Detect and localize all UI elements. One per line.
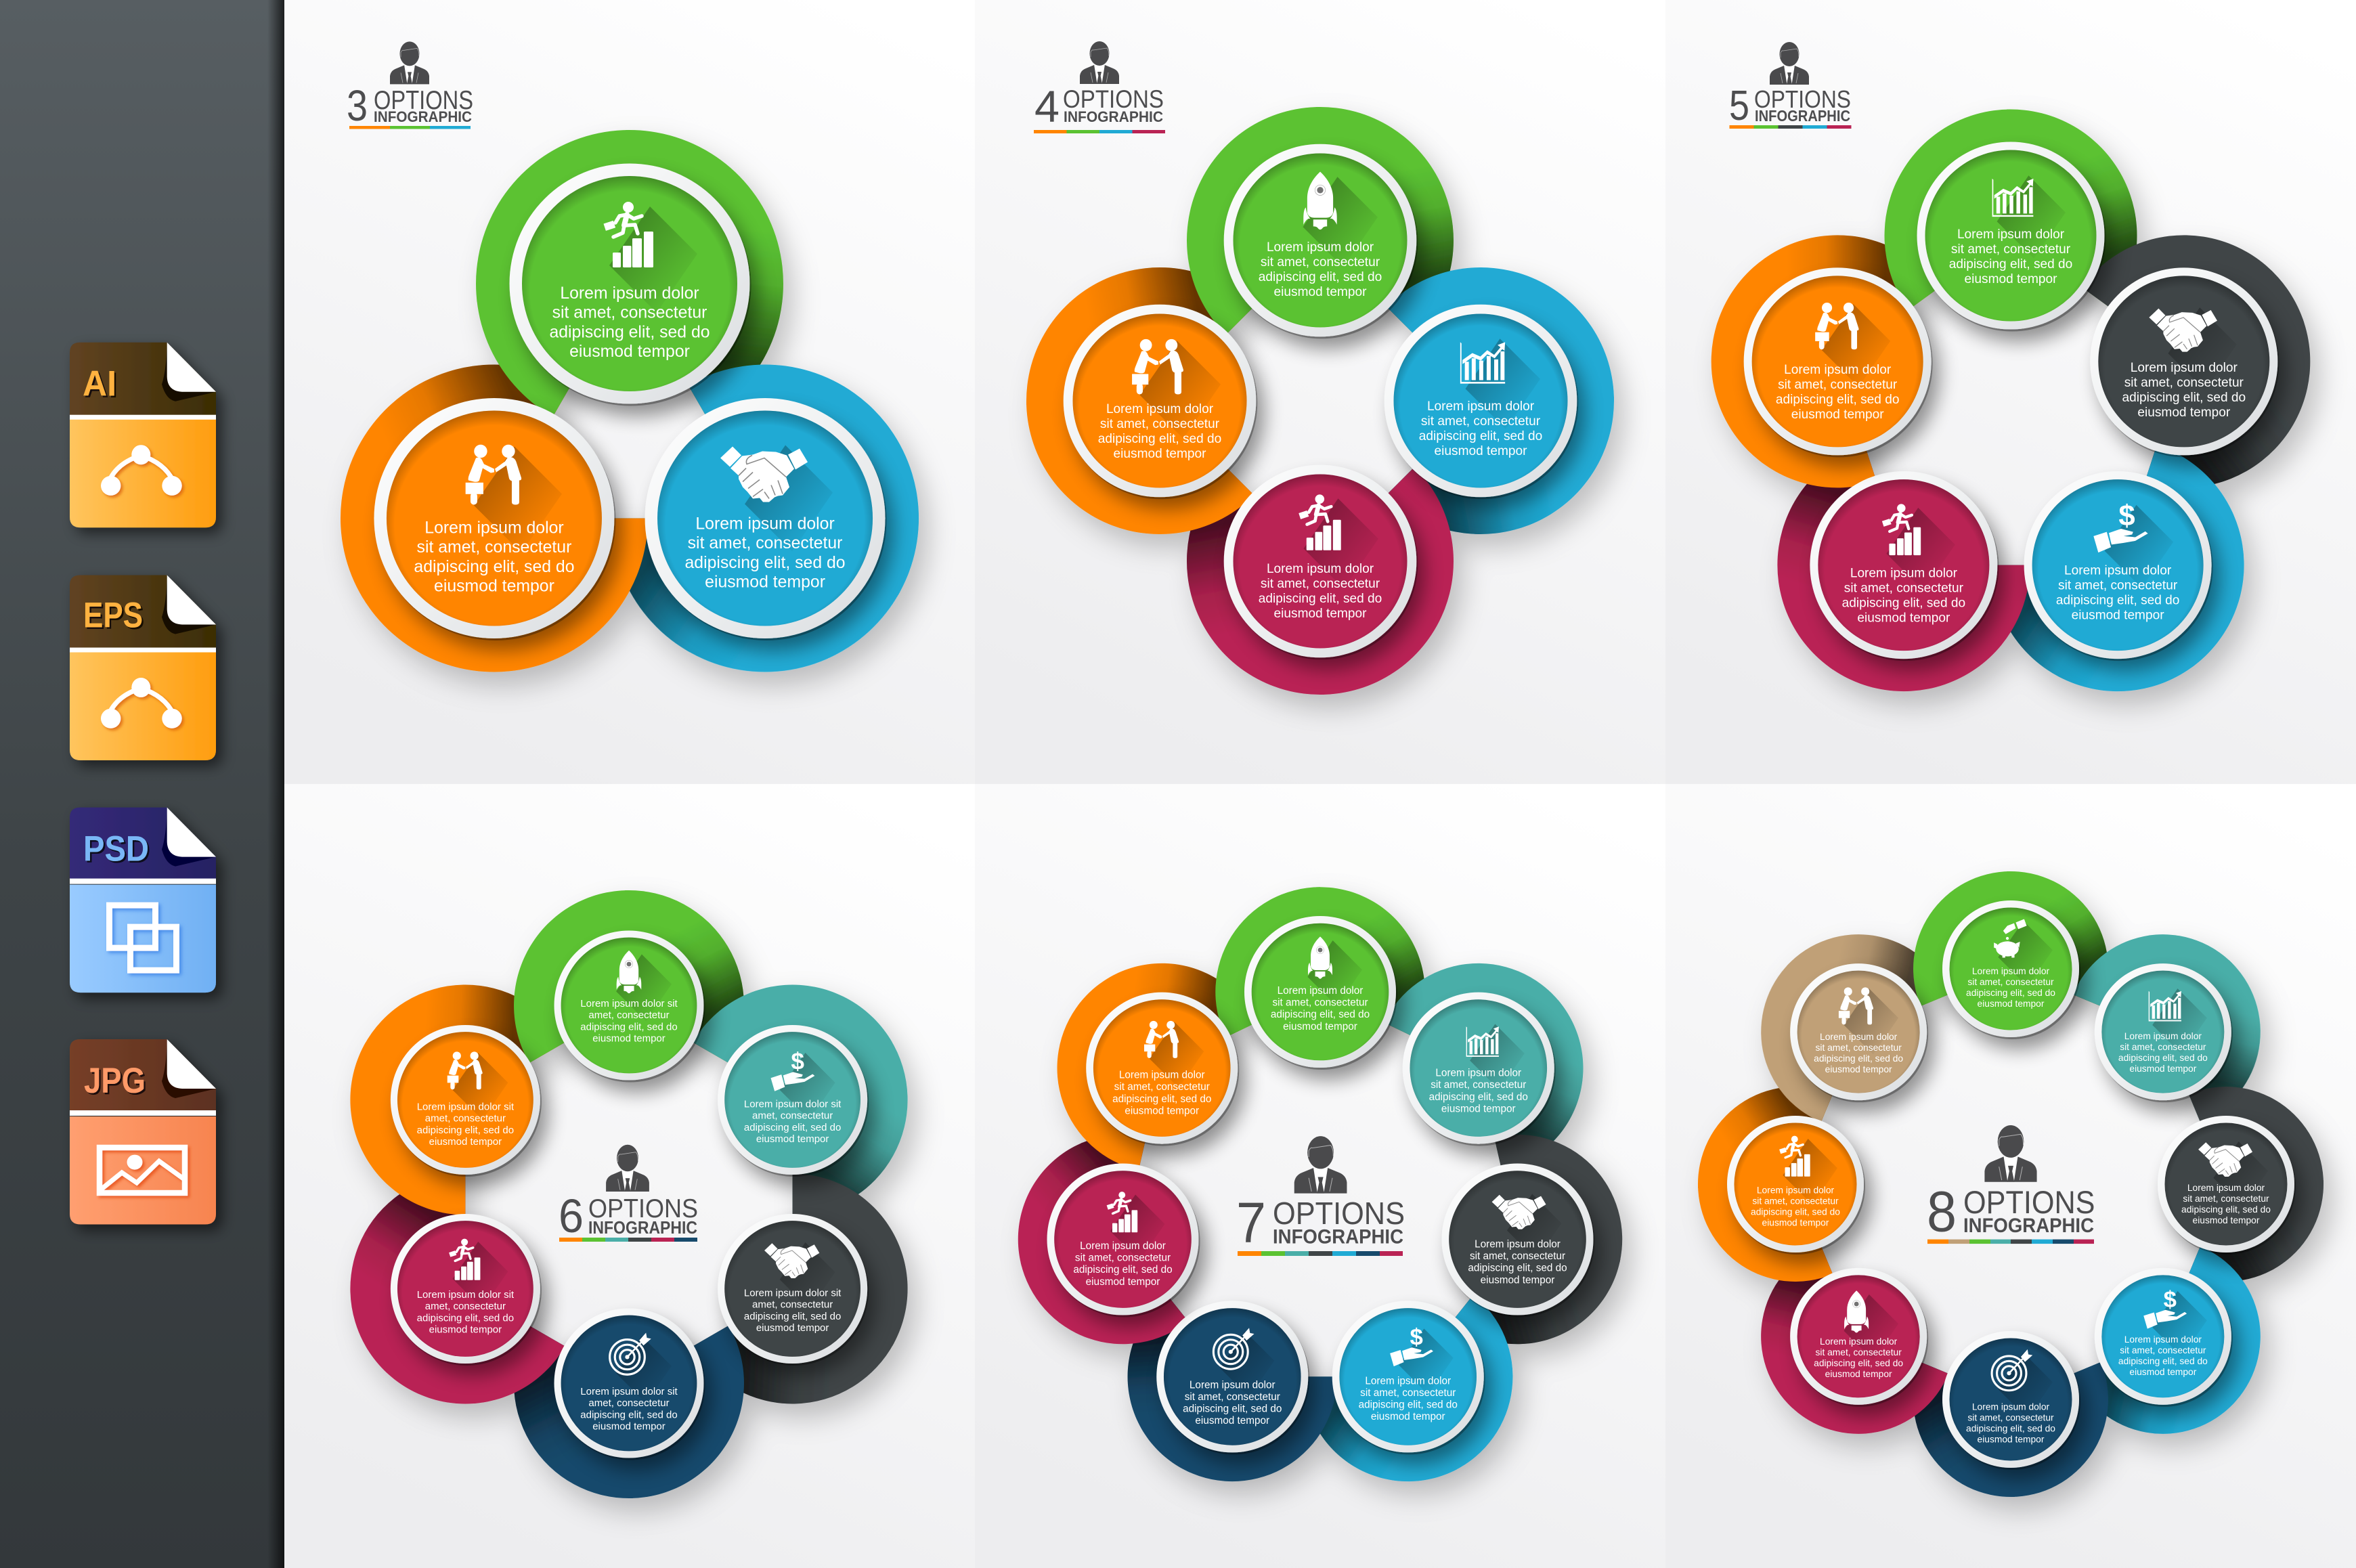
title: 3 options [347, 41, 473, 130]
node: green: adipiscing elit, sed do [580, 1021, 678, 1032]
node: navy: eiusmod tempor [1195, 1415, 1269, 1427]
segment bands [1698, 871, 2324, 1497]
node: teal: Lorem ipsum dolor [2124, 1031, 2202, 1041]
node: navy: adipiscing elit, sed do [1183, 1403, 1282, 1415]
sidebar [0, 0, 284, 1568]
node: orange: Lorem ipsum dolor [1119, 1070, 1205, 1081]
node: dark: eiusmod tempor [2193, 1215, 2260, 1225]
node: green: adipiscing elit, sed do [1271, 1009, 1370, 1020]
node: teal: eiusmod tempor [756, 1133, 829, 1145]
node: green: adipiscing elit, sed do [1966, 988, 2055, 998]
title: 5 options: OPTIONS [1754, 85, 1851, 113]
node: dark: Lorem ipsum dolor [2131, 361, 2238, 375]
node: dark: Lorem ipsum dolor sit [744, 1288, 842, 1299]
node: blue [2024, 471, 2212, 659]
node: green: eiusmod tempor [1283, 1021, 1357, 1032]
panel: 4 options [975, 0, 1665, 784]
title: 3 options: 3 [347, 81, 368, 130]
node: teal [718, 1025, 867, 1175]
node: crimson [1790, 1268, 1927, 1405]
title: 7 options: INFOGRAPHIC [1273, 1225, 1403, 1248]
node: dark: eiusmod tempor [756, 1322, 829, 1334]
node: orange [374, 398, 614, 638]
node: orange: Lorem ipsum dolor sit [417, 1101, 515, 1113]
node: green: amet, consectetur [588, 1009, 670, 1021]
node: green [509, 164, 750, 404]
file icon: AI: AI [83, 364, 116, 404]
node: orange: adipiscing elit, sed do [1098, 432, 1221, 446]
node: teal [1403, 993, 1554, 1144]
node: blue: sit amet, consectetur [2058, 579, 2178, 593]
segment bands [1026, 107, 1614, 695]
node: blue: sit amet, consectetur [688, 534, 842, 552]
node: blue [2095, 1268, 2231, 1405]
node: green: eiusmod tempor [1274, 285, 1367, 299]
node: dark: eiusmod tempor [1481, 1274, 1554, 1286]
node: crimson [391, 1214, 540, 1364]
node: navy: eiusmod tempor [1978, 1435, 2045, 1445]
panel: 7 options [975, 784, 1665, 1568]
node: orange [1744, 267, 1932, 455]
node: orange: eiusmod tempor [434, 578, 554, 596]
node: teal: Lorem ipsum dolor sit [744, 1098, 842, 1110]
title: 8 options: 8 [1927, 1179, 1957, 1243]
node: teal: sit amet, consectetur [2120, 1042, 2206, 1052]
segment bands [1678, 110, 2343, 741]
segment bands [997, 887, 1643, 1517]
node: orange: eiusmod tempor [1762, 1218, 1829, 1228]
node: teal: adipiscing elit, sed do [744, 1122, 841, 1133]
node: blue: Lorem ipsum dolor [2064, 564, 2172, 578]
node: dark: adipiscing elit, sed do [2122, 391, 2246, 405]
node: navy [1156, 1301, 1308, 1452]
title: 4 options: 4 [1034, 81, 1060, 131]
title: 8 options: OPTIONS [1963, 1184, 2095, 1220]
node: blue: Lorem ipsum dolor [1365, 1375, 1451, 1387]
node: dark: amet, consectetur [752, 1299, 833, 1311]
node: crimson: sit amet, consectetur [1815, 1347, 1902, 1357]
file icon: JPG [70, 1039, 216, 1224]
node: green: sit amet, consectetur [1967, 977, 2054, 987]
node: dark: adipiscing elit, sed do [744, 1311, 841, 1322]
node: dark: sit amet, consectetur [2124, 376, 2244, 390]
title: 3 options: OPTIONS [374, 86, 473, 115]
node: crimson: eiusmod tempor [1857, 611, 1950, 626]
node: crimson: Lorem ipsum dolor [1850, 567, 1958, 581]
node: orange: Lorem ipsum dolor [1106, 402, 1214, 416]
node: dark [2090, 267, 2277, 455]
node: blue: eiusmod tempor [2129, 1367, 2197, 1377]
node: dark: adipiscing elit, sed do [1468, 1263, 1567, 1274]
node: green [1942, 900, 2079, 1037]
node: navy: amet, consectetur [588, 1397, 670, 1409]
node: crimson [1224, 465, 1416, 657]
node: orange: adipiscing elit, sed do [1751, 1207, 1840, 1217]
node: blue: Lorem ipsum dolor [695, 515, 835, 533]
node: blue: adipiscing elit, sed do [2056, 594, 2179, 608]
node: tan [1790, 963, 1927, 1100]
node: orange: eiusmod tempor [1125, 1105, 1199, 1116]
node: blue: eiusmod tempor [1371, 1411, 1445, 1422]
title: 7 options: OPTIONS [1273, 1196, 1405, 1231]
title: 4 options [1034, 41, 1165, 133]
node: blue: eiusmod tempor [705, 573, 825, 592]
node: blue: Lorem ipsum dolor [1427, 399, 1535, 414]
node: orange: adipiscing elit, sed do [1112, 1093, 1211, 1105]
node: blue [645, 398, 886, 638]
node: green: sit amet, consectetur [552, 304, 707, 322]
node: orange: sit amet, consectetur [1100, 417, 1220, 431]
node: navy: Lorem ipsum dolor [1972, 1401, 2050, 1412]
node: orange: eiusmod tempor [429, 1136, 502, 1148]
node: green: adipiscing elit, sed do [1949, 257, 2072, 271]
node: blue: adipiscing elit, sed do [1359, 1399, 1458, 1411]
node: green [1224, 144, 1416, 336]
node: orange: adipiscing elit, sed do [417, 1125, 514, 1136]
node: crimson: Lorem ipsum dolor sit [417, 1289, 515, 1301]
node: orange: sit amet, consectetur [417, 538, 571, 557]
title: 6 options: OPTIONS [588, 1194, 698, 1223]
node: dark: sit amet, consectetur [1470, 1250, 1565, 1262]
node: blue: eiusmod tempor [1435, 444, 1527, 458]
node: teal: eiusmod tempor [2129, 1064, 2197, 1074]
node: blue: sit amet, consectetur [1360, 1387, 1456, 1399]
node: blue: sit amet, consectetur [1421, 414, 1541, 429]
node: orange [1064, 305, 1256, 497]
node: green [554, 930, 704, 1081]
node: green: Lorem ipsum dolor [1278, 985, 1363, 997]
node: crimson: adipiscing elit, sed do [1073, 1264, 1173, 1276]
panel: 3 options [284, 0, 975, 784]
node: teal: Lorem ipsum dolor [1435, 1068, 1521, 1079]
node: teal: sit amet, consectetur [1431, 1079, 1526, 1091]
node: orange: eiusmod tempor [1791, 408, 1884, 422]
node: blue: sit amet, consectetur [2120, 1345, 2206, 1355]
node: crimson [1810, 471, 1997, 659]
node: crimson: adipiscing elit, sed do [417, 1312, 514, 1324]
node: crimson: Lorem ipsum dolor [1820, 1336, 1898, 1347]
segment bands [284, 130, 975, 728]
node: green [1244, 916, 1396, 1068]
node: orange: Lorem ipsum dolor [1784, 363, 1892, 377]
node: navy: eiusmod tempor [592, 1421, 666, 1433]
node: navy [554, 1308, 704, 1458]
node: crimson: Lorem ipsum dolor [1267, 562, 1374, 576]
node: blue: Lorem ipsum dolor [2124, 1334, 2202, 1345]
title: 7 options [1236, 1136, 1405, 1256]
node: navy: sit amet, consectetur [1967, 1413, 2054, 1423]
node: green: Lorem ipsum dolor [560, 284, 699, 303]
node: navy: adipiscing elit, sed do [1966, 1424, 2055, 1434]
file icon: JPG: JPG [84, 1061, 146, 1101]
node: navy [1942, 1331, 2079, 1468]
node: crimson: amet, consectetur [425, 1301, 506, 1312]
node: dark: adipiscing elit, sed do [2181, 1204, 2271, 1215]
node: crimson: eiusmod tempor [429, 1324, 502, 1336]
node: orange [391, 1025, 540, 1175]
node: green: Lorem ipsum dolor sit [580, 998, 678, 1009]
node: green: Lorem ipsum dolor [1267, 240, 1374, 255]
node: crimson: eiusmod tempor [1825, 1369, 1892, 1379]
node: orange: amet, consectetur [425, 1113, 506, 1125]
title: 6 options: INFOGRAPHIC [588, 1217, 697, 1238]
node: orange: sit amet, consectetur [1778, 378, 1898, 392]
title: 5 options: 5 [1729, 83, 1749, 129]
file icon: EPS [70, 575, 216, 760]
node: crimson: sit amet, consectetur [1844, 582, 1964, 596]
node: blue: adipiscing elit, sed do [1419, 429, 1542, 443]
node: dark: eiusmod tempor [2137, 406, 2231, 420]
segment bands [308, 890, 950, 1498]
node: crimson: adipiscing elit, sed do [1842, 596, 1965, 611]
file icon: PSD [70, 808, 216, 993]
node: teal: eiusmod tempor [1441, 1103, 1516, 1114]
node: green: eiusmod tempor [569, 343, 690, 361]
node: tan: sit amet, consectetur [1815, 1043, 1902, 1053]
node: dark [2158, 1116, 2294, 1253]
node: green: eiusmod tempor [1965, 272, 2057, 286]
node: tan: Lorem ipsum dolor [1820, 1032, 1898, 1042]
node: orange: sit amet, consectetur [1114, 1081, 1210, 1093]
node: blue: adipiscing elit, sed do [684, 554, 846, 572]
node: crimson: Lorem ipsum dolor [1080, 1240, 1166, 1252]
node: orange: adipiscing elit, sed do [1776, 393, 1899, 407]
panel: 6 options [284, 784, 975, 1568]
file icon: PSD: PSD [83, 829, 149, 869]
panel: 8 options [1665, 784, 2356, 1568]
node: navy: Lorem ipsum dolor sit [580, 1386, 678, 1397]
node: blue [1332, 1301, 1484, 1452]
node: teal: amet, consectetur [752, 1110, 833, 1122]
node: green: eiusmod tempor [592, 1033, 666, 1045]
node: dark: Lorem ipsum dolor [2187, 1183, 2265, 1193]
node: dark: sit amet, consectetur [2183, 1194, 2269, 1204]
node: navy: sit amet, consectetur [1185, 1391, 1280, 1403]
node: navy: Lorem ipsum dolor [1190, 1379, 1275, 1391]
node: tan: eiusmod tempor [1825, 1064, 1892, 1074]
node: green: sit amet, consectetur [1951, 242, 2071, 257]
node: dark: Lorem ipsum dolor [1475, 1239, 1561, 1250]
node: green: adipiscing elit, sed do [1259, 270, 1382, 284]
node: orange [1727, 1116, 1864, 1253]
file icon: AI [70, 343, 216, 527]
title: 7 options: 7 [1236, 1191, 1266, 1255]
node: crimson: sit amet, consectetur [1075, 1253, 1171, 1264]
node: blue: eiusmod tempor [2072, 609, 2164, 623]
node: crimson [1047, 1164, 1198, 1315]
node: green [1917, 142, 2104, 329]
node: navy: adipiscing elit, sed do [580, 1409, 678, 1420]
file icon: EPS: EPS [83, 596, 143, 635]
node: crimson: sit amet, consectetur [1261, 577, 1380, 591]
node: orange: Lorem ipsum dolor [1757, 1185, 1835, 1196]
node: blue [1384, 305, 1577, 497]
node: green: Lorem ipsum dolor [1957, 227, 2065, 242]
node: green: sit amet, consectetur [1261, 255, 1380, 269]
node: teal [2095, 963, 2231, 1100]
node: crimson: eiusmod tempor [1086, 1276, 1160, 1288]
title: 5 options: INFOGRAPHIC [1755, 107, 1850, 125]
title: 3 options: INFOGRAPHIC [374, 108, 472, 125]
node: orange: eiusmod tempor [1114, 447, 1206, 461]
title: 4 options: INFOGRAPHIC [1064, 108, 1163, 125]
node: orange: adipiscing elit, sed do [414, 558, 575, 576]
title: 8 options [1927, 1125, 2095, 1244]
node: orange [1086, 993, 1238, 1144]
title: 6 options [559, 1145, 698, 1242]
title: 8 options: INFOGRAPHIC [1963, 1215, 2094, 1237]
node: green: eiusmod tempor [1978, 999, 2045, 1009]
node: dark [718, 1214, 867, 1364]
node: crimson: eiusmod tempor [1274, 607, 1367, 621]
node: tan: adipiscing elit, sed do [1814, 1053, 1903, 1064]
node: green: Lorem ipsum dolor [1972, 966, 2050, 976]
node: green: adipiscing elit, sed do [549, 323, 710, 341]
node: teal: adipiscing elit, sed do [2118, 1053, 2208, 1063]
node: teal: adipiscing elit, sed do [1429, 1091, 1528, 1103]
node: orange: sit amet, consectetur [1752, 1196, 1839, 1206]
title: 4 options: OPTIONS [1063, 85, 1164, 113]
node: orange: Lorem ipsum dolor [424, 519, 564, 538]
node: crimson: adipiscing elit, sed do [1814, 1358, 1903, 1368]
panel: 5 options [1665, 0, 2356, 784]
node: blue: adipiscing elit, sed do [2118, 1356, 2208, 1366]
title: 5 options [1729, 42, 1851, 129]
node: green: sit amet, consectetur [1272, 997, 1368, 1009]
title: 6 options: 6 [559, 1190, 584, 1242]
node: crimson: adipiscing elit, sed do [1259, 592, 1382, 606]
node: dark [1442, 1164, 1594, 1315]
